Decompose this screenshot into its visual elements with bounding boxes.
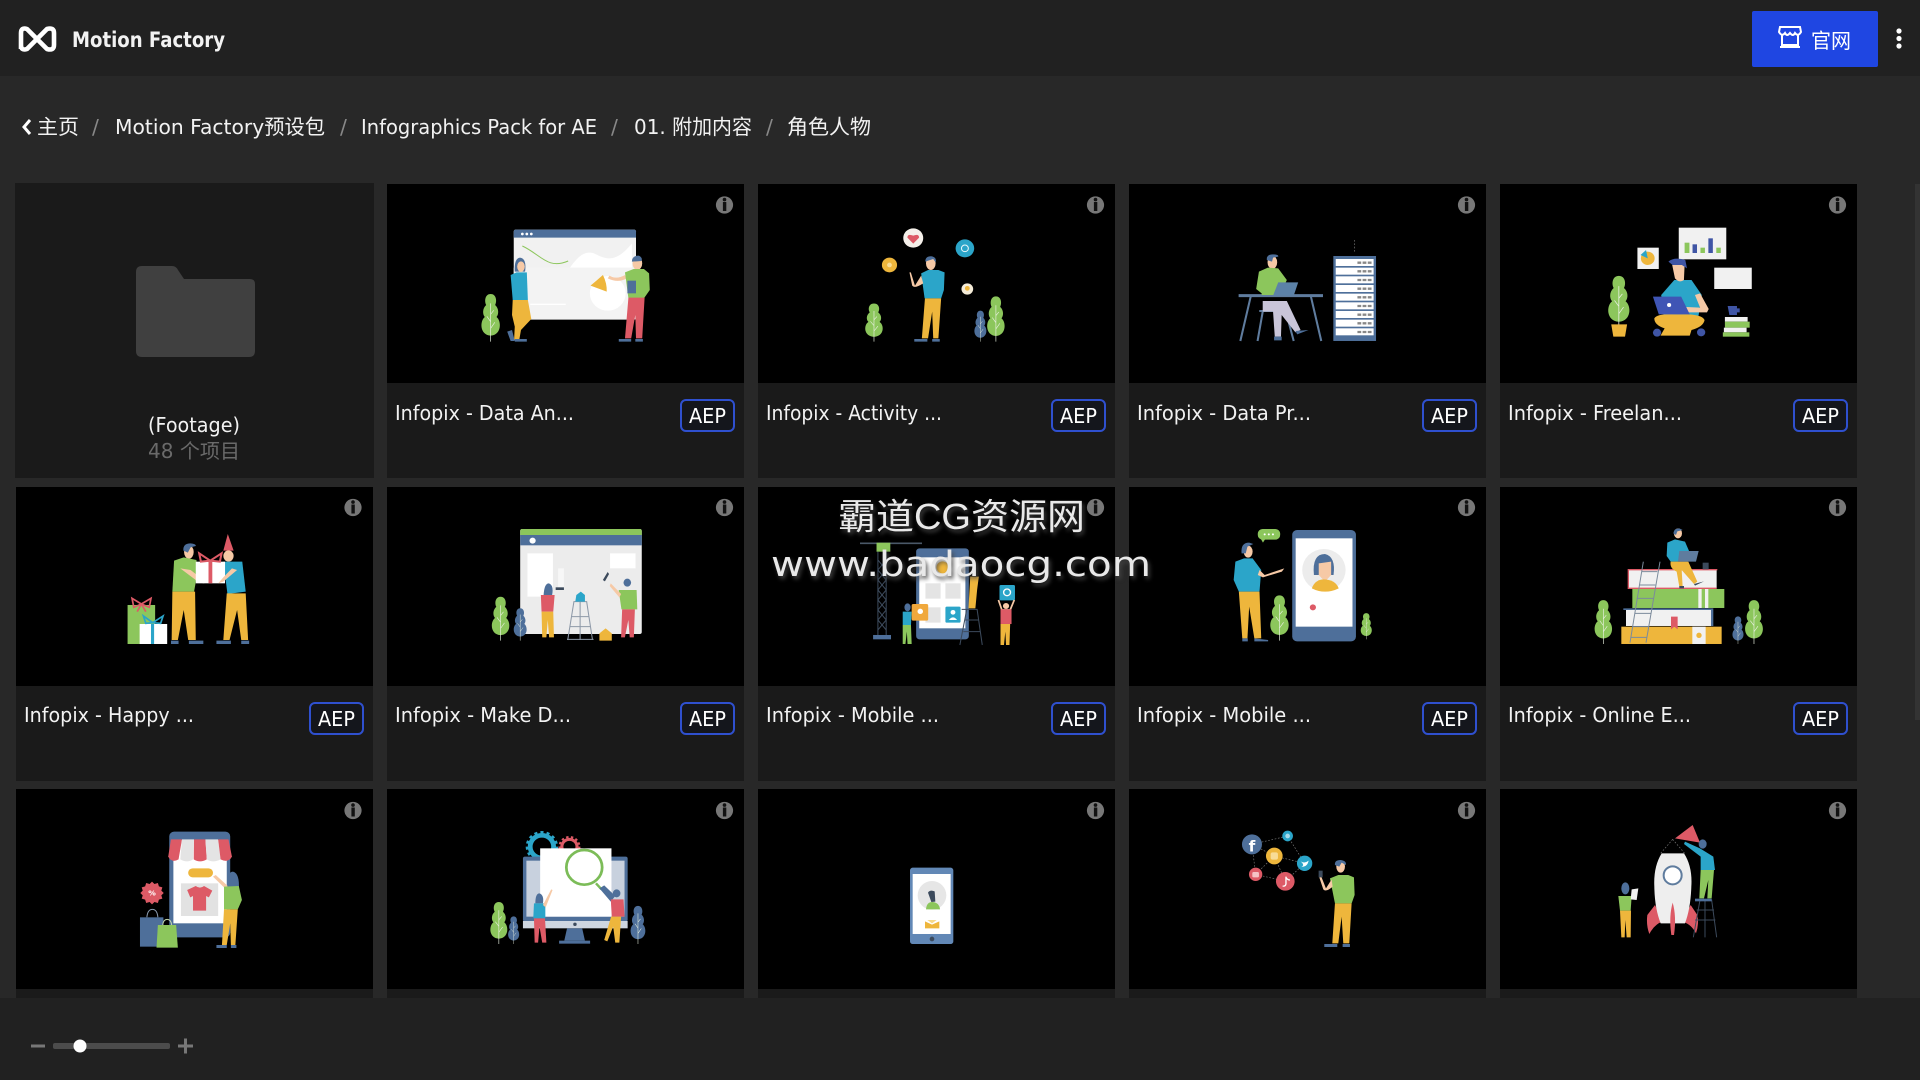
card: Activity <box>758 184 1115 478</box>
icon: info <box>1458 196 1475 214</box>
card: footage folder <box>15 183 374 478</box>
AEP badge: AEP <box>1802 707 1839 731</box>
illustration: freelancer <box>1608 228 1752 337</box>
AEP badge <box>681 703 734 734</box>
button: official site: 官网 <box>1811 30 1851 53</box>
card: Freelancer <box>1500 184 1857 478</box>
icon: info <box>344 802 362 819</box>
illustration: search on monitor <box>490 832 645 944</box>
breadcrumb: / <box>766 115 773 139</box>
card: Data Protection <box>1129 184 1486 478</box>
file name: Infopix - Activity ... <box>766 401 942 425</box>
icon: Motion Factory logo <box>21 28 54 50</box>
AEP badge: AEP <box>318 707 355 731</box>
AEP badge <box>310 703 363 734</box>
icon: folder <box>136 266 255 357</box>
icon: info <box>1087 802 1104 819</box>
AEP badge: AEP <box>689 707 726 731</box>
breadcrumb <box>24 115 871 139</box>
illustration: online shop <box>140 832 242 948</box>
card: search analysis <box>387 789 744 1019</box>
icon: info <box>1829 499 1846 516</box>
breadcrumb: 角色人物 <box>787 116 871 139</box>
card: rocket launch <box>1500 789 1857 1019</box>
file name: Infopix - Freelan... <box>1508 401 1682 425</box>
icon: info <box>1087 196 1104 214</box>
AEP badge <box>1052 400 1105 431</box>
icon: info <box>1829 802 1846 819</box>
card: Mobile Profile <box>1129 487 1486 781</box>
illustration: building a mobile app <box>860 543 1015 645</box>
illustration: data analysis <box>481 230 650 342</box>
file name: Infopix - Data Pr... <box>1137 401 1311 425</box>
card: Data Analysis <box>387 184 744 478</box>
icon: more menu <box>1896 28 1902 49</box>
icon: info <box>1458 499 1475 516</box>
illustration: social network: f <box>1249 838 1256 856</box>
illustration: gift exchange <box>128 534 249 644</box>
scrollbar <box>1915 184 1920 720</box>
file name: Infopix - Mobile ... <box>1137 703 1311 727</box>
AEP badge <box>1052 703 1105 734</box>
file name: Infopix - Online E... <box>1508 703 1691 727</box>
card: social network <box>1129 789 1486 1019</box>
file name: Infopix - Happy ... <box>24 703 194 727</box>
icon: info <box>716 802 733 819</box>
card: Mobile App <box>758 487 1115 781</box>
breadcrumb: / <box>92 115 99 139</box>
AEP badge <box>1794 703 1847 734</box>
illustration: stack of books <box>1595 528 1763 644</box>
card: Make Design <box>387 487 744 781</box>
watermark <box>771 496 1151 585</box>
breadcrumb: / <box>611 115 618 139</box>
header bar <box>0 0 1920 76</box>
AEP badge: AEP <box>1431 707 1468 731</box>
folder name: (Footage) <box>148 413 240 437</box>
icon: info <box>1829 196 1846 214</box>
illustration: mobile profile <box>1234 529 1372 641</box>
card: phone contact <box>758 789 1115 1019</box>
illustration: social network <box>1242 831 1355 947</box>
breadcrumb: / <box>340 115 347 139</box>
footer bar <box>0 998 1920 1080</box>
illustration: activity <box>865 228 1005 342</box>
breadcrumb: 01. 附加内容 <box>634 115 752 139</box>
AEP badge: AEP <box>1802 404 1839 428</box>
icon: info <box>344 499 362 516</box>
icon: info <box>716 196 733 214</box>
brand name: Motion Factory <box>72 28 225 52</box>
icon: info <box>1087 499 1104 516</box>
button: official site <box>1752 11 1878 67</box>
AEP badge <box>681 400 734 431</box>
card: Happy <box>16 487 373 781</box>
illustration: painting a web page <box>492 529 642 641</box>
AEP badge: AEP <box>689 404 726 428</box>
AEP badge: AEP <box>1060 404 1097 428</box>
AEP badge <box>1423 400 1476 431</box>
illustration: data server <box>1239 240 1376 341</box>
card: online shop <box>16 789 373 1019</box>
zoom slider <box>31 1038 193 1054</box>
item count: 48 个项目 <box>148 439 240 463</box>
breadcrumb: Motion Factory预设包 <box>115 115 325 139</box>
illustration: phone contact <box>910 868 953 944</box>
breadcrumb: Infographics Pack for AE <box>361 115 597 139</box>
AEP badge <box>1423 703 1476 734</box>
AEP badge: AEP <box>1060 707 1097 731</box>
breadcrumb: 主页 <box>37 116 79 139</box>
card: Online Education <box>1500 487 1857 781</box>
file name: Infopix - Mobile ... <box>766 703 939 727</box>
file name: Infopix - Data An... <box>395 401 574 425</box>
illustration: rocket launch <box>1618 825 1717 937</box>
file name: Infopix - Make D... <box>395 703 571 727</box>
AEP badge <box>1794 400 1847 431</box>
icon: info <box>716 499 733 516</box>
AEP badge: AEP <box>1431 404 1468 428</box>
watermark: www.badaocg.com <box>771 545 1151 585</box>
watermark: 霸道CG资源网 <box>838 496 1085 537</box>
icon: info <box>1458 802 1475 819</box>
illustration: online shop: % <box>148 888 156 897</box>
